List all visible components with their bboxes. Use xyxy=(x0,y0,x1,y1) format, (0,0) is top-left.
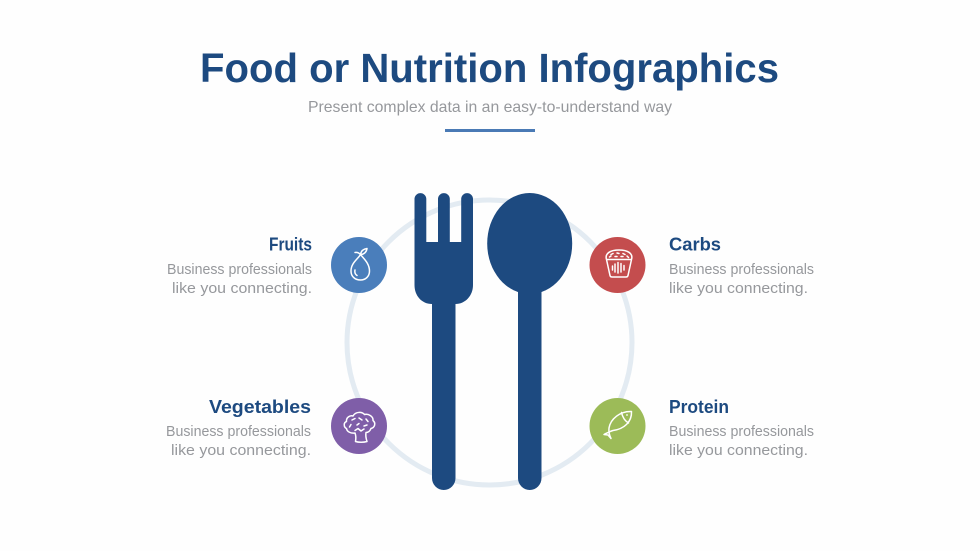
panel: fruits xyxy=(167,234,387,297)
panel: protein xyxy=(590,397,814,459)
text: fruits description: like you connecting. xyxy=(172,281,312,297)
plate ring xyxy=(347,200,632,485)
heading: vegetables: Vegetables xyxy=(209,397,311,417)
icon: broccoli on purple circle xyxy=(331,398,387,454)
panel: carbs xyxy=(590,234,814,297)
icon: fish on green circle xyxy=(590,398,646,454)
icon: pear on blue circle xyxy=(331,237,387,293)
heading: protein: Protein xyxy=(669,397,729,417)
icon: muffin on red circle xyxy=(590,237,646,293)
title underline xyxy=(445,129,535,132)
text: carbs description: like you connecting. xyxy=(669,281,808,297)
icon: spoon xyxy=(487,193,572,490)
text: vegetables description: like you connecting. xyxy=(171,443,311,459)
subtitle: Present complex data in an easy-to-understand way xyxy=(308,99,672,116)
text: protein description: Business professionals xyxy=(669,424,814,440)
icon: fork xyxy=(414,193,473,490)
text: carbs description: Business professionals xyxy=(669,262,814,278)
title: Food or Nutrition Infographics xyxy=(200,45,779,91)
text: protein description: like you connecting. xyxy=(669,443,808,459)
panel: vegetables xyxy=(166,397,387,459)
heading: carbs: Carbs xyxy=(669,234,721,254)
text: fruits description: Business professionals xyxy=(167,262,312,278)
heading: fruits: Fruits xyxy=(269,234,312,254)
text: vegetables description: Business professionals xyxy=(166,424,311,440)
